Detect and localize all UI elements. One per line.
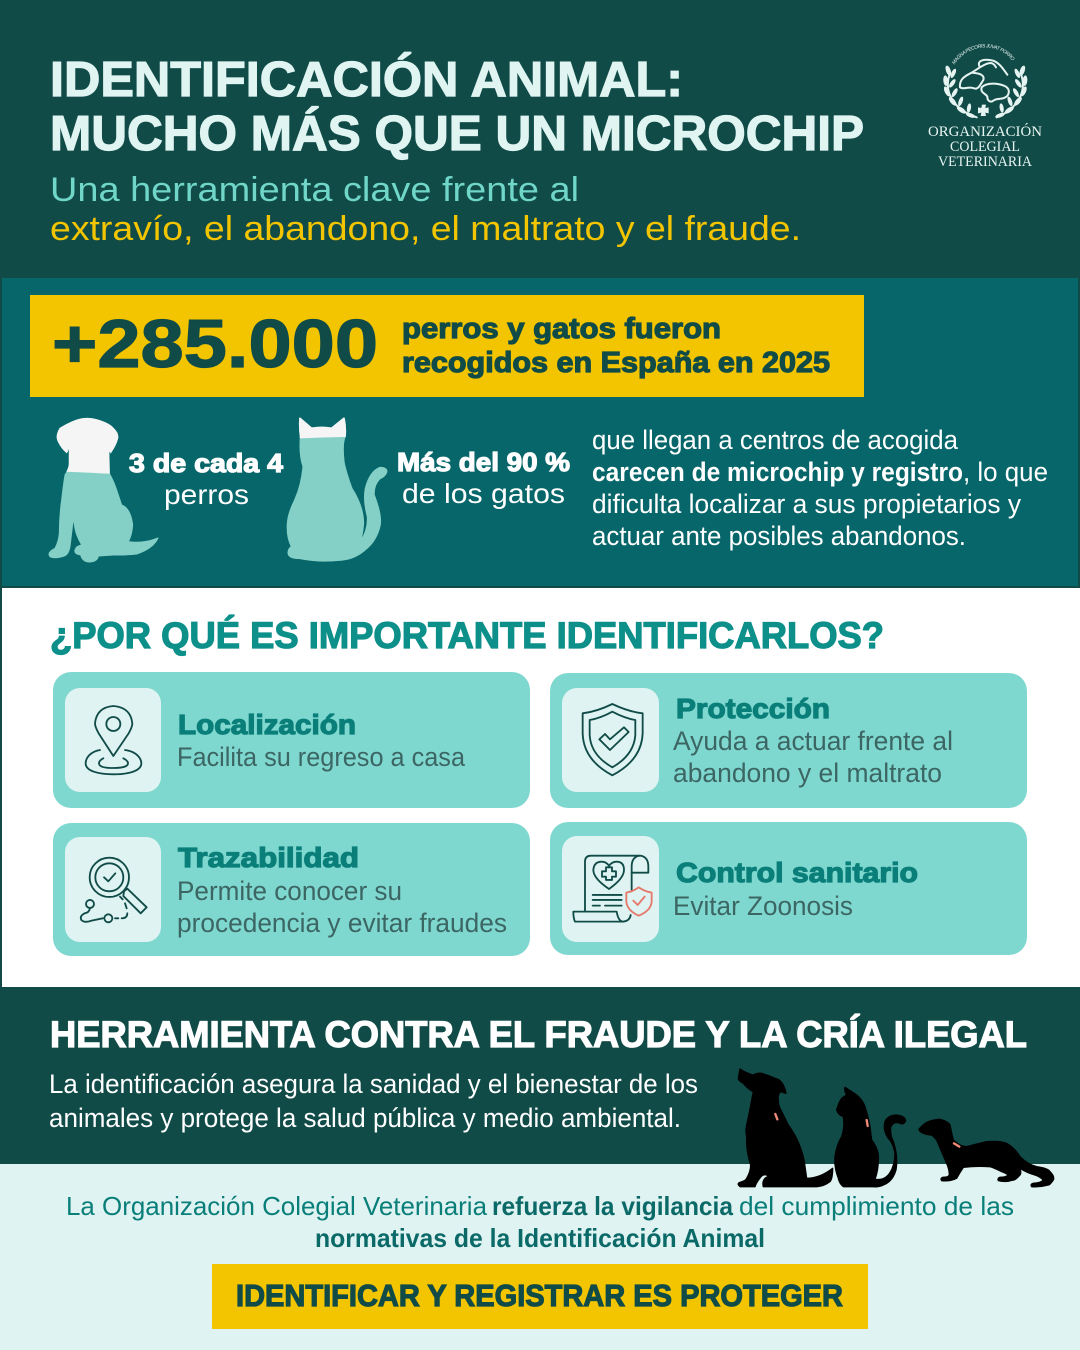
card: control sanitario (550, 822, 1027, 955)
banner: +285.000: +285.000 (52, 306, 378, 382)
text: public health: La identificación asegura la sanidad y el bienestar de los (49, 1069, 698, 1099)
logo: VETERINARIA (938, 154, 1032, 170)
card: trazabilidad (53, 823, 530, 956)
banner: +285.000: recogidos en España en 2025 (402, 347, 830, 379)
text: vigilance: La Organización Colegial Veterinaria (66, 1191, 488, 1221)
text: shelter explanation (592, 425, 1048, 551)
icon: health record (573, 856, 652, 922)
title: IDENTIFICACIÓN ANIMAL: (50, 52, 683, 107)
subtitle: extravío, el abandono, el maltrato y el fraude. (50, 210, 801, 248)
panel: statistics (0, 278, 1080, 588)
icon: dog, cat and ferret silhouettes (738, 1069, 1054, 1187)
stat: cats: de los gatos (402, 478, 565, 509)
stat: dogs: perros (164, 479, 249, 510)
banner: +285.000 (30, 295, 864, 397)
card: trazabilidad: Permite conocer su (177, 876, 402, 906)
card: localización (53, 672, 530, 808)
text: shelter explanation: dificulta localizar a sus propietarios y (592, 489, 1021, 519)
panel: header (0, 0, 1080, 278)
logo: COLEGIAL (950, 139, 1020, 155)
text: shelter explanation: actuar ante posibles abandonos. (592, 521, 966, 551)
subtitle: Una herramienta clave frente al (50, 171, 579, 209)
panel: why identify (0, 588, 1080, 987)
panel: fraud (0, 987, 1080, 1164)
subtitle (50, 171, 801, 248)
text: public health: animales y protege la salud pública y medio ambiental. (49, 1103, 681, 1133)
stat: cats: Más del 90 % (397, 447, 570, 477)
card: protección: abandono y el maltrato (673, 758, 942, 788)
button: slogan (212, 1264, 868, 1329)
logo: MAGNA PECORIS JUVAT PORRO (952, 44, 1014, 64)
text: shelter explanation: carecen de microchip y registro (592, 457, 963, 487)
text: vigilance: del cumplimiento de las (739, 1191, 1014, 1221)
icon: magnifier with route (81, 858, 147, 922)
text: vigilance: normativas de la Identificación Animal (315, 1223, 765, 1253)
panel: call to action (0, 1164, 1080, 1350)
text: vigilance (66, 1191, 1014, 1253)
title (50, 52, 864, 161)
banner: +285.000: perros y gatos fueron (402, 313, 721, 345)
icon: shield (583, 704, 643, 775)
stat: dogs: 3 de cada 4 (129, 448, 284, 478)
card: control sanitario: Control sanitario (676, 857, 918, 888)
button: slogan: IDENTIFICAR Y REGISTRAR ES PROTEGER (236, 1278, 843, 1313)
text: shelter explanation: que llegan a centros de acogida (592, 425, 959, 455)
stat: cats (397, 447, 570, 509)
card: control sanitario: Evitar Zoonosis (673, 891, 853, 921)
heading: ¿POR QUÉ ES IMPORTANTE IDENTIFICARLOS? (50, 615, 884, 656)
heading: fraud: HERRAMIENTA CONTRA EL FRAUDE Y LA CRÍA ILEGAL (50, 1014, 1027, 1055)
card: protección (550, 673, 1027, 808)
text: shelter explanation: , lo que (963, 457, 1048, 487)
card: trazabilidad: procedencia y evitar fraudes (177, 908, 507, 938)
card: trazabilidad: Trazabilidad (178, 842, 359, 873)
text: public health (49, 1069, 698, 1133)
text: vigilance: refuerza la vigilancia (492, 1191, 733, 1221)
card: protección: Ayuda a actuar frente al (673, 726, 953, 756)
title: MUCHO MÁS QUE UN MICROCHIP (50, 107, 864, 161)
icon: cat silhouette (287, 418, 387, 561)
icon: dog silhouette (49, 418, 158, 562)
logo: ORGANIZACIÓN (928, 123, 1043, 140)
card: localización: Facilita su regreso a casa (177, 742, 466, 772)
card: localización: Localización (178, 709, 356, 740)
stat: dogs (129, 448, 284, 510)
icon: location pin (86, 706, 141, 774)
logo (928, 44, 1043, 170)
card: protección: Protección (676, 693, 830, 724)
